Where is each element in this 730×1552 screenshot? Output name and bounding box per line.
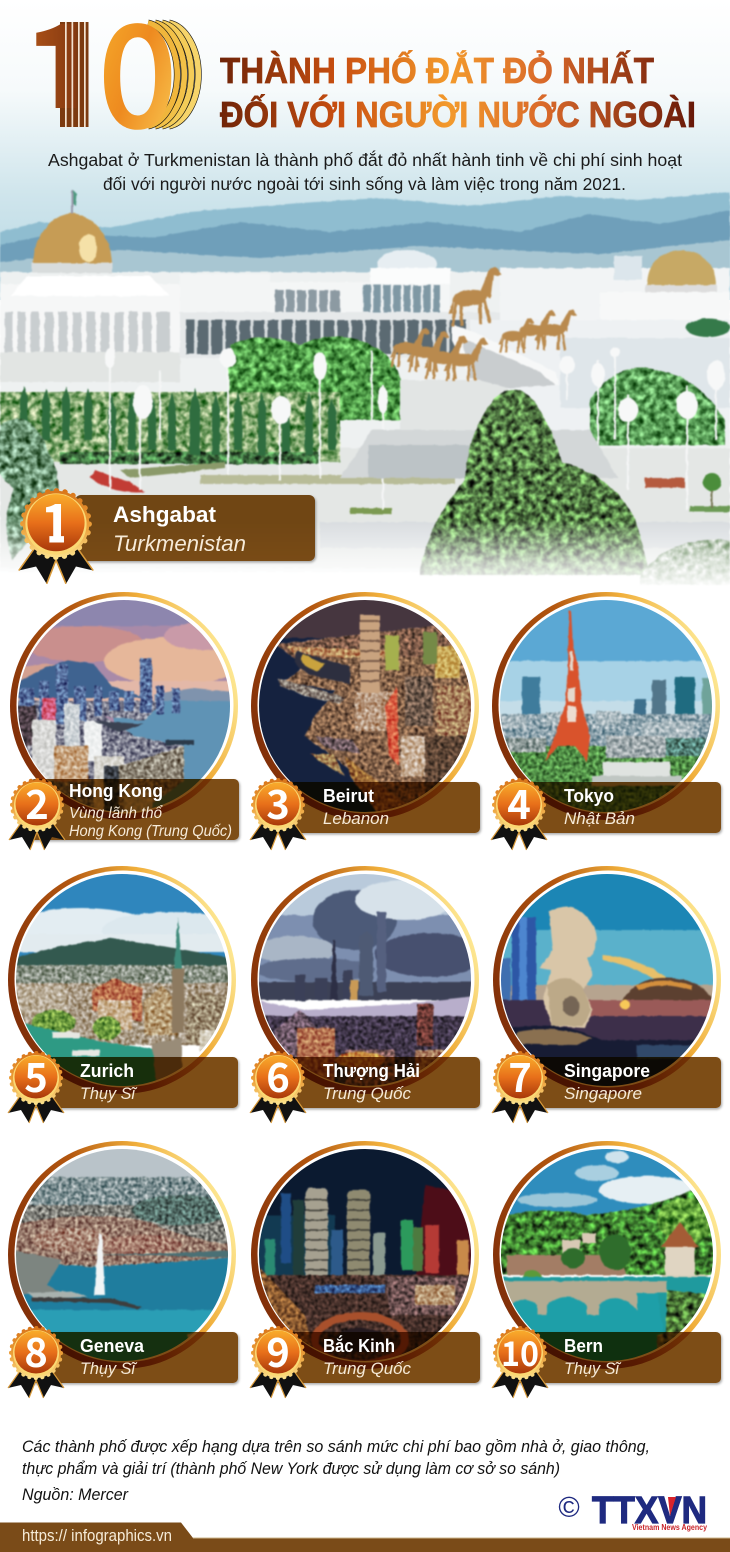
medal 10: 10 xyxy=(501,1327,539,1376)
intro text xyxy=(48,149,682,194)
panel: Zurich: Zurich xyxy=(80,1061,134,1081)
medal 4 xyxy=(491,773,547,850)
medal 2: 2 xyxy=(25,773,49,831)
photo: Shanghai xyxy=(259,874,471,1086)
panel: Shanghai: Trung Quốc xyxy=(323,1084,411,1103)
panel: Geneva: Thụy Sĩ xyxy=(80,1359,138,1378)
panel: Hong Kong xyxy=(9,592,244,850)
medal 9 xyxy=(250,1321,306,1398)
photo: Geneva xyxy=(12,1145,232,1365)
rank 1 label: Ashgabat: Turkmenistan xyxy=(113,531,246,556)
footer bar xyxy=(0,1522,730,1552)
label bar xyxy=(30,1332,238,1383)
photo: Singapore xyxy=(497,870,717,1090)
footnote xyxy=(22,1437,650,1504)
panel: Geneva xyxy=(8,1141,238,1398)
medal 6 xyxy=(250,1046,306,1123)
photo: Bern xyxy=(497,1145,717,1365)
medal 9: 9 xyxy=(266,1321,290,1379)
title: ĐỐI VỚI NGƯỜI NƯỚC NGOÀI xyxy=(220,93,696,135)
panel: Zurich xyxy=(8,866,242,1123)
zero echoes xyxy=(148,23,198,126)
medal 6: 6 xyxy=(266,1046,290,1104)
panel: Shanghai xyxy=(250,866,485,1123)
medal 3: 3 xyxy=(266,773,290,831)
footnote: Các thành phố được xếp hạng dựa trên so sánh mức chi phí bao gồm nhà ở, giao thông, xyxy=(22,1437,650,1456)
panel: Shanghai: Thượng Hải xyxy=(323,1061,420,1081)
panel: Beijing: Trung Quốc xyxy=(323,1359,411,1378)
medal 7 xyxy=(492,1046,548,1123)
label bar xyxy=(270,1057,480,1108)
panel: Tokyo: Tokyo xyxy=(564,786,614,806)
medal 5: 5 xyxy=(24,1046,48,1104)
photo: Beijing xyxy=(255,1145,475,1365)
medal 1: 1 xyxy=(40,482,72,559)
title xyxy=(220,49,696,135)
panel: Hong Kong: Hong Kong (Trung Quốc) xyxy=(69,823,232,840)
panel: Beijing xyxy=(250,1141,480,1398)
intro text: Ashgabat ở Turkmenistan là thành phố đắt đỏ nhất hành tinh về chi phí sinh hoạt xyxy=(48,149,682,170)
medal 10 xyxy=(492,1327,548,1398)
hero photo: Ashgabat xyxy=(0,0,730,605)
medal 5 xyxy=(8,1046,64,1123)
label bar xyxy=(512,1332,721,1383)
rank 1 label: Ashgabat: Ashgabat xyxy=(113,502,217,527)
panel: Beijing: Bắc Kinh xyxy=(323,1335,395,1356)
panel: Bern xyxy=(492,1141,721,1398)
medal 1 xyxy=(19,482,93,584)
photo: Zurich xyxy=(16,874,228,1086)
medal 3 xyxy=(250,773,306,850)
number stripes xyxy=(60,22,88,127)
panel: Singapore: Singapore xyxy=(564,1061,650,1081)
rank 1 label: Ashgabat xyxy=(19,482,315,584)
panel: Beirut: Lebanon xyxy=(323,809,389,828)
panel: Hong Kong: Hong Kong xyxy=(69,781,163,801)
panel: Tokyo xyxy=(491,592,721,850)
panel: Beirut xyxy=(250,592,480,850)
panel: Bern: Bern xyxy=(564,1336,603,1356)
panel: Tokyo: Nhật Bản xyxy=(564,809,635,828)
panel: Singapore xyxy=(492,866,721,1123)
medal 7: 7 xyxy=(508,1046,532,1104)
panel: Geneva: Geneva xyxy=(80,1336,145,1356)
medal 4: 4 xyxy=(507,773,531,831)
panel: Singapore: Singapore xyxy=(564,1084,642,1103)
medal 8: 8 xyxy=(24,1321,48,1379)
label bar xyxy=(30,779,239,840)
label bar xyxy=(512,1057,721,1108)
photo: Beirut xyxy=(255,596,475,816)
medal 2 xyxy=(9,773,65,850)
big number 10 xyxy=(36,20,202,130)
photo: Hong Kong xyxy=(18,600,230,812)
label bar xyxy=(511,782,721,833)
medal 8 xyxy=(8,1321,64,1398)
label bar xyxy=(30,1057,238,1108)
panel: Bern: Thụy Sĩ xyxy=(564,1359,622,1378)
logo: TTXVN: Vietnam News Agency xyxy=(632,1522,707,1532)
title: THÀNH PHỐ ĐẮT ĐỎ NHẤT xyxy=(220,49,654,91)
footnote: thực phẩm và giải trí (thành phố New York được sử dụng làm cơ sở so sánh) xyxy=(22,1459,560,1478)
logo: TTXVN: TTXVN xyxy=(592,1490,707,1532)
intro text: đối với người nước ngoài tới sinh sống và làm việc trong năm 2021. xyxy=(103,174,626,194)
website url: https:// infographics.vn xyxy=(22,1526,172,1545)
photo: Tokyo xyxy=(496,596,716,816)
panel: Zurich: Thụy Sĩ xyxy=(80,1084,138,1103)
footnote: Nguồn: Mercer xyxy=(22,1485,129,1504)
panel: Hong Kong: Vùng lãnh thổ xyxy=(69,804,163,822)
panel: Beirut: Beirut xyxy=(323,786,374,806)
copyright mark: © xyxy=(558,1492,580,1524)
label bar xyxy=(270,782,480,833)
label bar xyxy=(270,1332,480,1383)
